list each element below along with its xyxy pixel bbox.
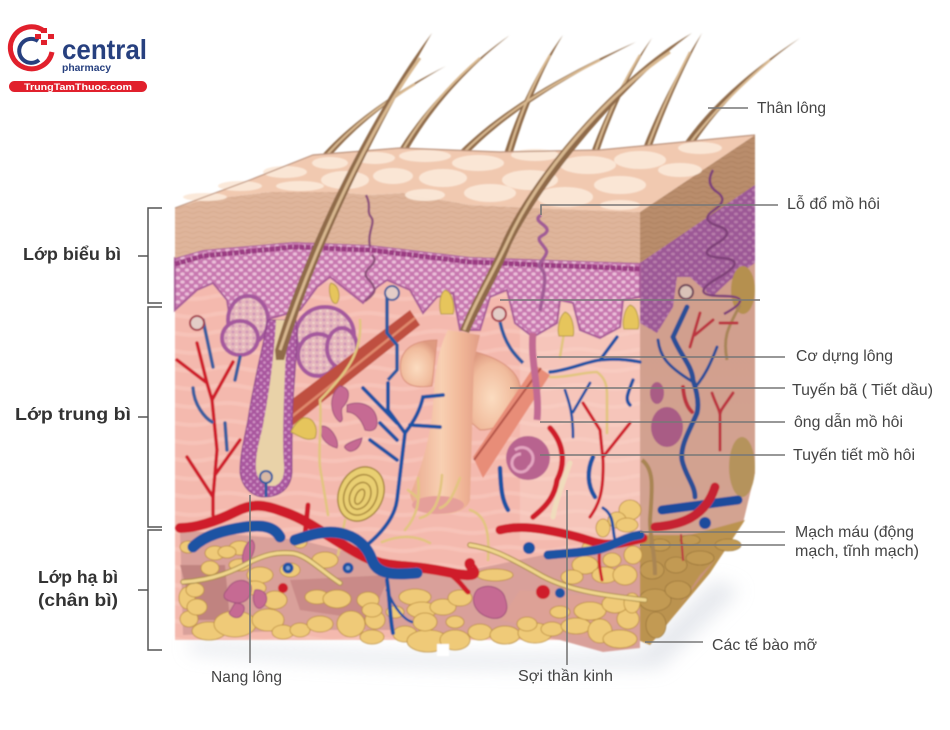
heading: hypodermis: (chân bì) <box>38 590 118 610</box>
heading: dermis: Lớp trung bì <box>15 404 131 424</box>
label: sweat duct: ông dẫn mồ hôi <box>794 412 903 431</box>
logo: Central Pharmacy: central <box>62 34 147 65</box>
bracket: dermis <box>138 307 162 527</box>
hair shafts above the surface <box>316 33 800 209</box>
logo: Central Pharmacy: TrungTamThuoc.com <box>24 82 132 93</box>
hair-bulb vessel loops <box>190 286 523 450</box>
column <box>410 330 480 514</box>
arteries <box>177 343 643 592</box>
right face nerves <box>725 305 740 360</box>
panel: front face dermis <box>175 250 640 640</box>
small glands <box>224 386 507 618</box>
leader lines <box>250 108 785 665</box>
fat cells <box>179 500 642 652</box>
left lobe <box>400 340 437 387</box>
sebaceous glands near first follicle <box>222 296 357 376</box>
hair shaft: long central hair <box>460 33 692 333</box>
pacinian corpuscle <box>329 459 393 529</box>
bracket: epidermis <box>138 208 162 303</box>
soft ground shadow <box>190 580 740 669</box>
logo: Central Pharmacy <box>9 27 147 93</box>
label: blood vessels: mạch, tĩnh mạch) <box>795 543 919 560</box>
heading: hypodermis: Lớp hạ bì <box>38 567 118 587</box>
right lobe <box>468 350 521 430</box>
skin block illustration <box>175 33 800 656</box>
bracket: hypodermis <box>138 530 162 650</box>
dark basal strip <box>175 247 640 269</box>
label: fat cells: Các tế bào mỡ <box>712 637 817 654</box>
yellow nerve trunks <box>183 545 645 600</box>
panel: right face of the skin block <box>638 135 755 645</box>
veins <box>193 337 640 633</box>
panel: stratum corneum tan layer <box>175 192 640 263</box>
right face fat <box>638 520 745 645</box>
right face glands <box>650 382 683 447</box>
panel: epidermis pink-purple layer <box>175 242 640 338</box>
muscle: first hair erector <box>287 310 420 430</box>
label: nerve fibre: Sợi thần kinh <box>518 668 613 685</box>
label: blood vessels <box>795 524 919 560</box>
label: hair shaft: Thân lông <box>757 100 826 117</box>
heading: hypodermis <box>38 567 118 610</box>
logo: Central Pharmacy: pharmacy <box>62 63 111 74</box>
hair shaft: long left hair <box>275 33 432 360</box>
sweat duct through epidermis <box>538 215 547 311</box>
vessel cross-sections <box>278 542 565 599</box>
right face arteries <box>681 313 737 560</box>
label: blood vessels: Mạch máu (động <box>795 524 914 541</box>
label: sweat pore: Lỗ đổ mồ hôi <box>787 194 880 213</box>
sweat gland <box>506 333 550 480</box>
label: sweat gland: Tuyến tiết mồ hôi <box>793 447 915 464</box>
label: arrector pili: Cơ dựng lông <box>796 348 893 365</box>
label: hair follicle: Nang lông <box>211 669 282 686</box>
right face sweat duct <box>703 170 740 314</box>
sensory buds <box>291 283 639 439</box>
nerves <box>319 320 607 560</box>
heading: epidermis: Lớp biểu bì <box>23 244 121 264</box>
panel: top skin surface <box>175 135 755 212</box>
follicle: first hair <box>240 320 297 497</box>
right face veins <box>658 307 717 497</box>
central hair follicle and sebaceous gland <box>400 330 521 514</box>
panel: hypodermis fat layer <box>179 500 642 656</box>
label: sebaceous gland: Tuyến bã ( Tiết dầu) <box>792 382 933 399</box>
muscle: central hair erector <box>473 365 550 478</box>
